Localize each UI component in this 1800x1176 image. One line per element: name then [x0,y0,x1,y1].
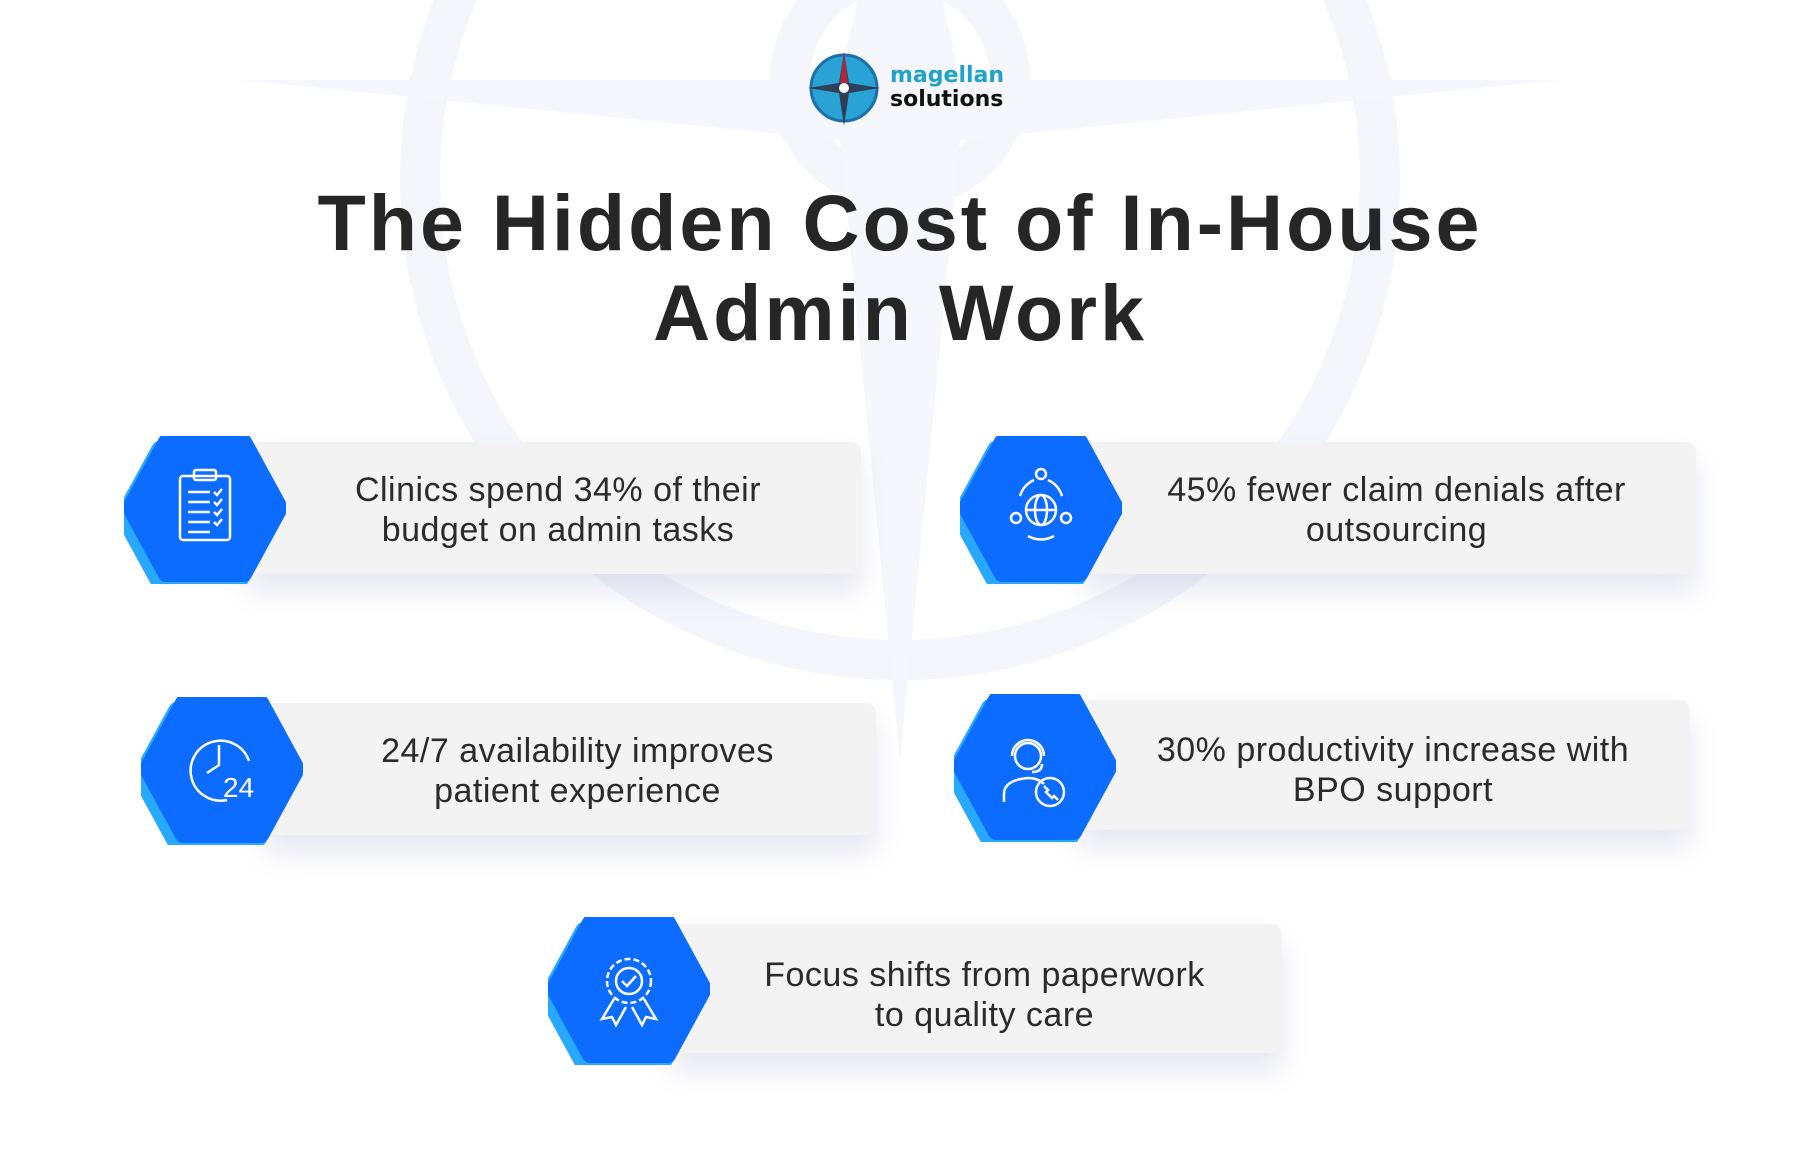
icon: compass [808,52,880,126]
text [355,471,761,549]
card 2 [960,436,1702,598]
text [381,732,774,810]
icon: 24h clock hexagon: 24 [223,772,254,803]
text: BPO support [1293,771,1493,809]
icon: globe network hexagon [960,436,1122,584]
icon: clipboard hexagon [124,436,286,584]
title: Admin Work [653,268,1147,357]
text: patient experience [434,772,721,810]
text [1167,471,1626,549]
icon: 24h clock hexagon [141,697,303,845]
text: Clinics spend 34% of their [355,471,761,509]
title: The Hidden Cost of In-House [317,178,1482,267]
logo [808,52,1004,126]
card 3 [141,697,882,858]
text: outsourcing [1306,511,1487,549]
logo text: solutions [890,87,1003,112]
card 5 [548,917,1288,1076]
text: Focus shifts from paperwork [764,956,1205,994]
text: budget on admin tasks [382,511,734,549]
text: to quality care [875,996,1094,1034]
icon: award badge hexagon [548,917,710,1065]
logo text [890,63,1004,112]
card 4 [954,694,1696,854]
card 1 [124,436,866,598]
text: 24/7 availability improves [381,732,774,770]
title [317,178,1482,357]
text [1157,731,1629,809]
text: 45% fewer claim denials after [1167,471,1626,509]
text: 30% productivity increase with [1157,731,1629,769]
text [764,956,1205,1034]
logo text: magellan [890,63,1004,88]
icon: support agent hexagon [954,694,1116,842]
